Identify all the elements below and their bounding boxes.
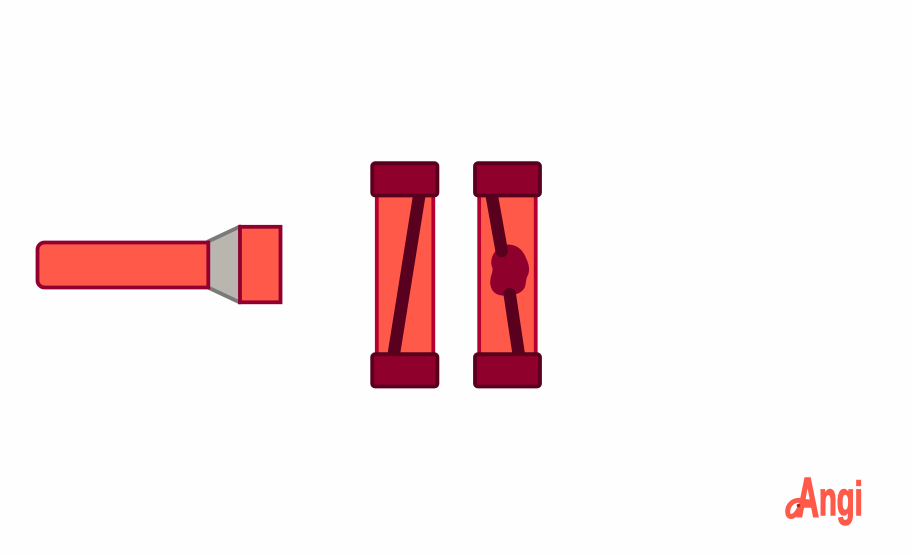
- icon: intact fuse: [372, 163, 437, 386]
- icon: flashlight: [38, 226, 280, 302]
- blown fuse bottom cap: [475, 354, 540, 386]
- blown fuse upper wire: [492, 194, 502, 251]
- blown fuse burn mark: [490, 244, 529, 296]
- icon: blown fuse: [475, 163, 540, 386]
- blown fuse lower wire: [510, 294, 519, 356]
- flashlight head: [240, 227, 280, 302]
- logo: Angi: [788, 468, 863, 528]
- logo letters ngi: ngi: [819, 474, 863, 526]
- blown fuse tube: [479, 190, 536, 360]
- flashlight cone: [208, 226, 240, 302]
- intact fuse top cap: [372, 163, 437, 196]
- logo letter A: A: [796, 468, 819, 528]
- flashlight body: [38, 242, 208, 288]
- logo swash crossing: [797, 504, 800, 507]
- intact fuse wire: [394, 194, 420, 356]
- blown fuse top cap: [475, 163, 540, 196]
- intact fuse tube: [377, 190, 433, 360]
- logo swash: [788, 500, 807, 517]
- intact fuse bottom cap: [372, 354, 437, 386]
